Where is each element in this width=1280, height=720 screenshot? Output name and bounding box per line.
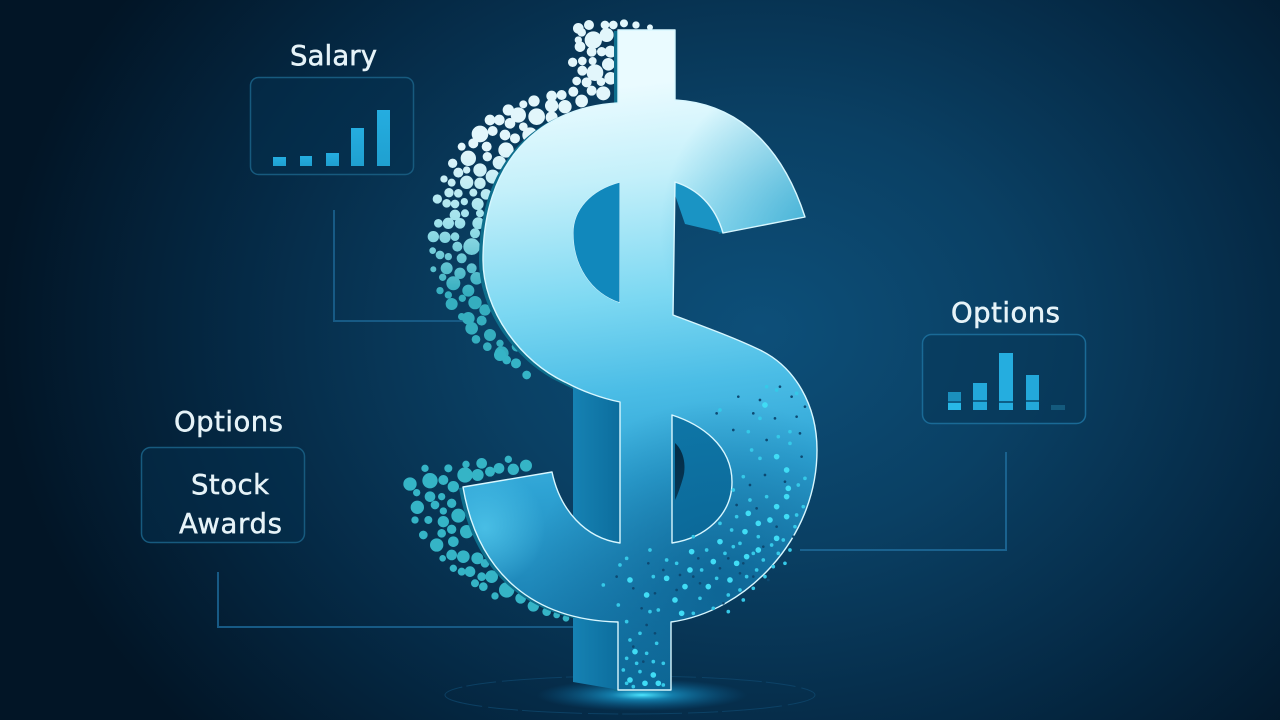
back depth shadow (459, 31, 813, 691)
upper right counter (675, 182, 723, 233)
heading: salary: Salary (290, 40, 377, 72)
connector: stock awards (218, 572, 578, 627)
back bar: centre (573, 380, 621, 545)
panel: options right (922, 297, 1086, 424)
heading: options: Options (951, 297, 1060, 329)
connector: salary (334, 210, 470, 321)
S shading (464, 112, 816, 660)
label: stock: Stock (191, 469, 269, 501)
bar chart: salary (273, 110, 390, 166)
panel: stock awards (142, 406, 304, 542)
S face (463, 30, 817, 690)
particles: lower left teal dots (404, 350, 568, 621)
particles: upper left white dots (429, 20, 652, 359)
chart frame (922, 334, 1086, 424)
heading: options left: Options (174, 406, 283, 438)
panel: salary (250, 40, 414, 174)
chart frame (250, 78, 414, 174)
label frame (142, 448, 304, 542)
base glow platform (445, 676, 815, 714)
connector: options (800, 452, 1006, 550)
particles: dispersing cyan specks on S (603, 387, 805, 687)
label: awards: Awards (179, 508, 282, 540)
lower counter (672, 415, 732, 543)
bar chart: options (948, 353, 1065, 410)
back bar: bottom (573, 618, 620, 690)
dollar sign (459, 29, 818, 691)
S outline (463, 30, 817, 690)
upper left counter (573, 182, 620, 303)
